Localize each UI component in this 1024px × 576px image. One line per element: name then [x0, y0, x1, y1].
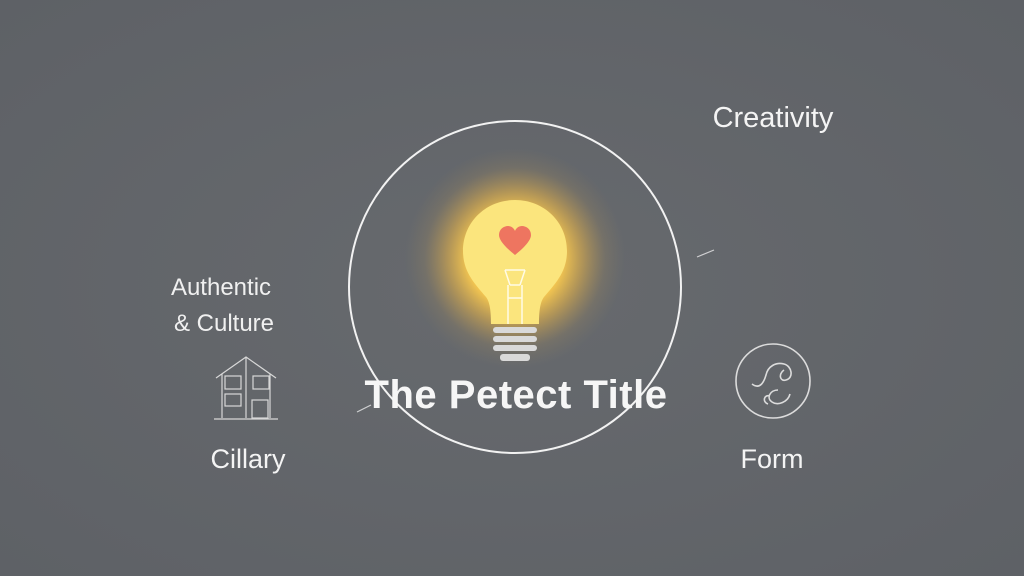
label: Creativity: Creativity [713, 102, 834, 134]
label: Form: Form [740, 444, 804, 474]
label: Authentic & Culture: & Culture [174, 310, 274, 337]
label: Authentic & Culture: Authentic [171, 274, 271, 301]
label: Cillary: Cillary [210, 444, 286, 474]
icon: light bulb [405, 148, 625, 368]
title: The Petect Title [365, 373, 667, 417]
icon: house [214, 357, 278, 419]
icon: swirl circle [736, 344, 810, 418]
ring [349, 121, 681, 453]
connector strokes [357, 250, 714, 412]
